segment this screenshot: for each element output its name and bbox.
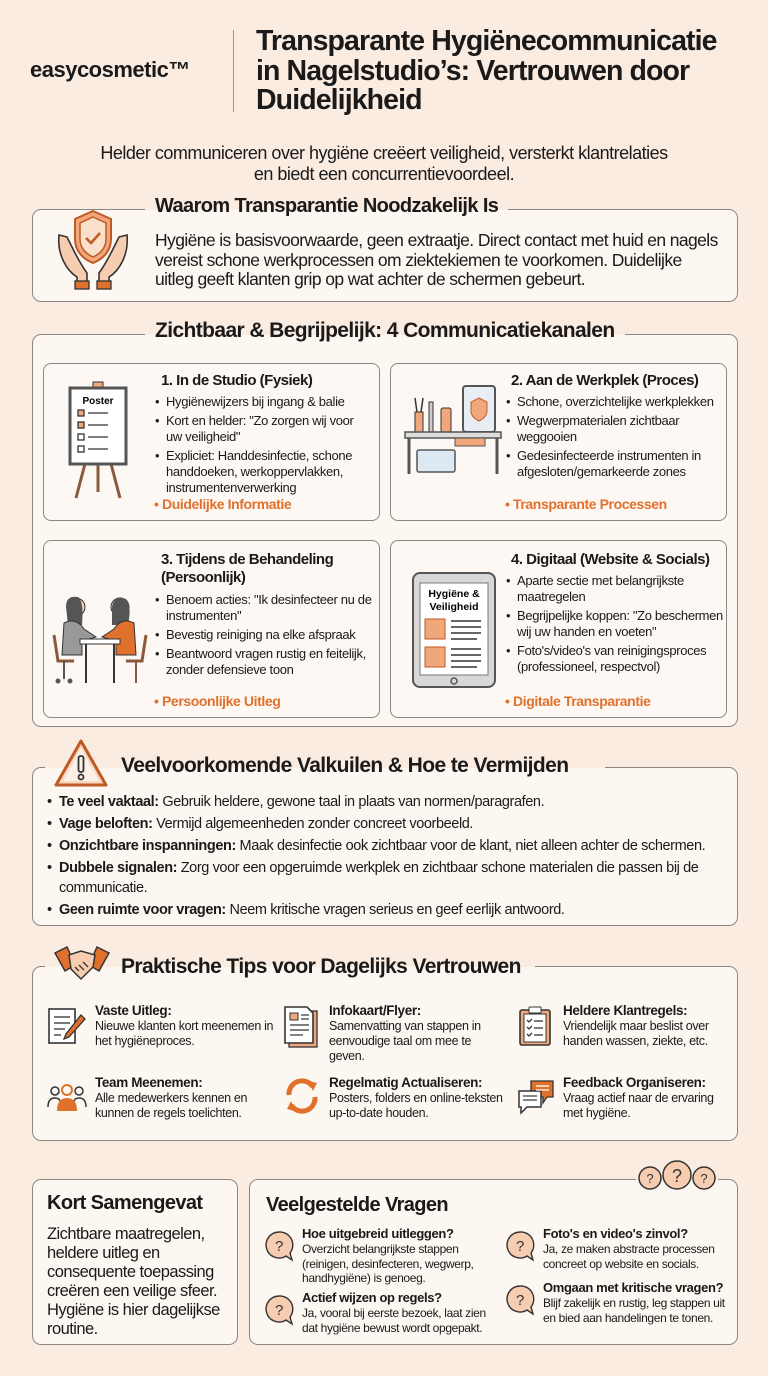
faq 1: Overzicht belangrijkste stappen (reinigen, desinfecteren, wegwerp, handhygiëne) is genoeg. [302, 1242, 474, 1285]
tip: infokaart: Samenvatting van stappen in eenvoudige taal om mee te geven. [329, 1019, 481, 1063]
panel: practical tips [32, 966, 738, 1141]
icon: warning [54, 739, 108, 786]
text: summary: Zichtbare maatregelen, heldere uitleg en consequente toepassing creëren een veilige sfeer. Hygiëne is hier dagelijkse routine. [47, 1225, 220, 1338]
heading: channels: Zichtbaar & Begrijpelijk: 4 Communicatiekanalen [155, 319, 615, 342]
heading: pitfalls [45, 738, 605, 790]
list: card 2: Schone, overzichtelijke werkplekken [517, 394, 714, 409]
text: why: vereist schone werkprocessen om ziektekiemen te voorkomen. Duidelijke [155, 250, 682, 270]
list: pitfalls [48, 794, 705, 918]
icon: tablet [412, 572, 496, 688]
list: card 2: Gedesinfecteerde instrumenten in afgesloten/gemarkeerde zones [517, 448, 701, 479]
list: card 1: Kort en helder: "Zo zorgen wij voor uw veiligheid" [166, 413, 353, 444]
text: why [155, 230, 718, 289]
list: card 1 [156, 394, 354, 495]
icon: tablet: Hygiëne & [428, 588, 480, 600]
heading: summary: Kort Samengevat [47, 1192, 202, 1214]
list: pitfalls: Dubbele signalen: Zorg voor een opgeruimde werkplek en zichtbaar schone materialen die passen bij de communicatie. [59, 860, 698, 896]
tip: klantregels [519, 1003, 709, 1048]
list: pitfalls: Geen ruimte voor vragen: Neem kritische vragen serieus en geef eerlijk antwoord. [59, 902, 565, 918]
panel: summary [32, 1179, 238, 1345]
faq 2: ? [275, 1302, 283, 1319]
panel: why transparency [32, 209, 738, 302]
tip: vaste uitleg [48, 1003, 273, 1048]
title [256, 25, 717, 116]
heading: pitfalls: Veelvoorkomende Valkuilen & Hoe te Vermijden [121, 754, 568, 777]
tip: feedback [518, 1075, 714, 1120]
heading: tips [45, 943, 535, 987]
title: card 2: 2. Aan de Werkplek (Proces) [511, 372, 698, 389]
tag: card 2: • Transparante Processen [505, 496, 667, 512]
title: card 3: (Persoonlijk) [161, 569, 245, 586]
icon: two people at table [52, 596, 148, 684]
tag: card 3: • Persoonlijke Uitleg [154, 693, 280, 709]
text: why: Hygiëne is basisvoorwaarde, geen extraatje. Direct contact met huid en nagels [155, 230, 718, 250]
tip: vaste uitleg: Vaste Uitleg: [95, 1003, 171, 1018]
panel: 4 channels [32, 334, 738, 727]
list: card 2: Wegwerpmaterialen zichtbaar weggooien [517, 413, 679, 444]
list: card 3: Benoem acties: "Ik desinfecteer nu de instrumenten" [166, 592, 372, 623]
icon: poster easel [68, 382, 128, 498]
list: card 3: Bevestig reiniging na elke afspraak [166, 627, 355, 642]
icon: question bubbles: ? [646, 1171, 654, 1186]
faq 1: ? [275, 1238, 283, 1255]
title: card 3 [161, 551, 333, 586]
title: card 1: 1. In de Studio (Fysiek) [161, 372, 312, 389]
list: card 2 [506, 394, 714, 479]
tip: vaste uitleg: Nieuwe klanten kort meenemen in het hygiëneproces. [95, 1019, 273, 1048]
faq 3: Ja, ze maken abstracte processen concreet op website en socials. [543, 1242, 715, 1270]
tip: klantregels: Vriendelijk maar beslist over handen wassen, ziekte, etc. [563, 1019, 709, 1048]
subtitle [100, 143, 668, 184]
subtitle: Helder communiceren over hygiëne creëert veiligheid, versterkt klantrelaties [100, 143, 668, 163]
faq 4: Omgaan met kritische vragen? [543, 1280, 723, 1295]
tip: infokaart: Infokaart/Flyer: [329, 1003, 421, 1018]
faq 2 [265, 1290, 486, 1334]
faq 3 [506, 1226, 715, 1270]
tip: klantregels: Heldere Klantregels: [563, 1003, 687, 1018]
heading: tips: Praktische Tips voor Dagelijks Vertrouwen [121, 955, 521, 978]
list: pitfalls: Vage beloften: Vermijd algemeenheden zonder concreet voorbeeld. [59, 816, 473, 832]
heading: FAQ: Veelgestelde Vragen [266, 1194, 448, 1216]
card 1 [43, 363, 380, 521]
heading: why: Waarom Transparantie Noodzakelijk Is [155, 195, 498, 217]
faq 3: ? [516, 1238, 524, 1255]
tip: actualiseren [286, 1075, 503, 1120]
list: card 3 [156, 592, 372, 677]
icon: hands with shield [58, 210, 128, 290]
divider [233, 30, 234, 112]
faq 1: Hoe uitgebreid uitleggen? [302, 1226, 454, 1241]
icon: question bubbles [636, 1160, 718, 1190]
text: why: uitleg geeft klanten grip op wat achter de schermen gebeurt. [155, 269, 585, 289]
tip: feedback: Feedback Organiseren: [563, 1075, 706, 1090]
tip: team: Team Meenemen: [95, 1075, 202, 1090]
icon: tablet: Veiligheid [429, 601, 479, 613]
tip: team: Alle medewerkers kennen en kunnen de regels toelichten. [95, 1091, 247, 1120]
list: pitfalls: Te veel vaktaal: Gebruik heldere, gewone taal in plaats van normen/paragrafen. [59, 794, 544, 810]
card 2 [390, 363, 727, 521]
tag: card 4: • Digitale Transparantie [505, 693, 650, 709]
icon: workstation [404, 385, 502, 474]
tip: team [47, 1075, 247, 1120]
icon: handshake [54, 946, 110, 980]
title: card 3: 3. Tijdens de Behandeling [161, 551, 333, 568]
title: Transparante Hygiënecommunicatie [256, 25, 717, 57]
list: card 1: Expliciet: Handdesinfectie, schone handdoeken, werkoppervlakken, instrumentenverwerking [166, 448, 352, 495]
tag: card 1: • Duidelijke Informatie [154, 496, 291, 512]
title: card 4: 4. Digitaal (Website & Socials) [511, 551, 709, 568]
card 3 [43, 540, 380, 718]
icon: poster easel: Poster [82, 396, 114, 407]
panel: pitfalls [32, 767, 738, 926]
faq 4: Blijf zakelijk en rustig, leg stappen uit en bied aan handelingen te tonen. [543, 1296, 725, 1324]
tip: infokaart [284, 1003, 481, 1063]
list: pitfalls: Onzichtbare inspanningen: Maak desinfectie ook zichtbaar voor de klant, niet alleen achter de schermen. [59, 838, 705, 854]
faq 4: ? [516, 1292, 524, 1309]
title: in Nagelstudio’s: Vertrouwen door [256, 54, 689, 86]
logo: easycosmetic™ [30, 57, 190, 82]
icon: question bubbles: ? [672, 1166, 682, 1186]
faq 4 [506, 1280, 725, 1324]
list: card 1: Hygiënewijzers bij ingang & balie [166, 394, 344, 409]
list: card 4: Foto's/video's van reinigingsproces (professioneel, respectvol) [517, 643, 706, 674]
tip: actualiseren: Posters, folders en online-teksten up-to-date houden. [329, 1091, 503, 1120]
title: Duidelijkheid [256, 84, 422, 116]
tip: actualiseren: Regelmatig Actualiseren: [329, 1075, 482, 1090]
faq 1 [265, 1226, 474, 1285]
list: card 4 [506, 573, 723, 674]
card 4 [390, 540, 727, 718]
subtitle: en biedt een concurrentievoordeel. [254, 164, 514, 184]
tip: feedback: Vraag actief naar de ervaring met hygiëne. [563, 1091, 714, 1120]
faq 2: Ja, vooral bij eerste bezoek, laat zien dat hygiëne bewust wordt opgepakt. [302, 1306, 486, 1334]
panel: FAQ [249, 1179, 738, 1345]
list: card 4: Aparte sectie met belangrijkste maatregelen [517, 573, 684, 604]
icon: question bubbles: ? [700, 1171, 708, 1186]
faq 3: Foto's en video's zinvol? [543, 1226, 688, 1241]
list: card 3: Beantwoord vragen rustig en feitelijk, zonder defensieve toon [166, 646, 366, 677]
list: card 4: Begrijpelijke koppen: "Zo beschermen wij uw handen en voeten" [517, 608, 723, 639]
faq 2: Actief wijzen op regels? [302, 1290, 442, 1305]
